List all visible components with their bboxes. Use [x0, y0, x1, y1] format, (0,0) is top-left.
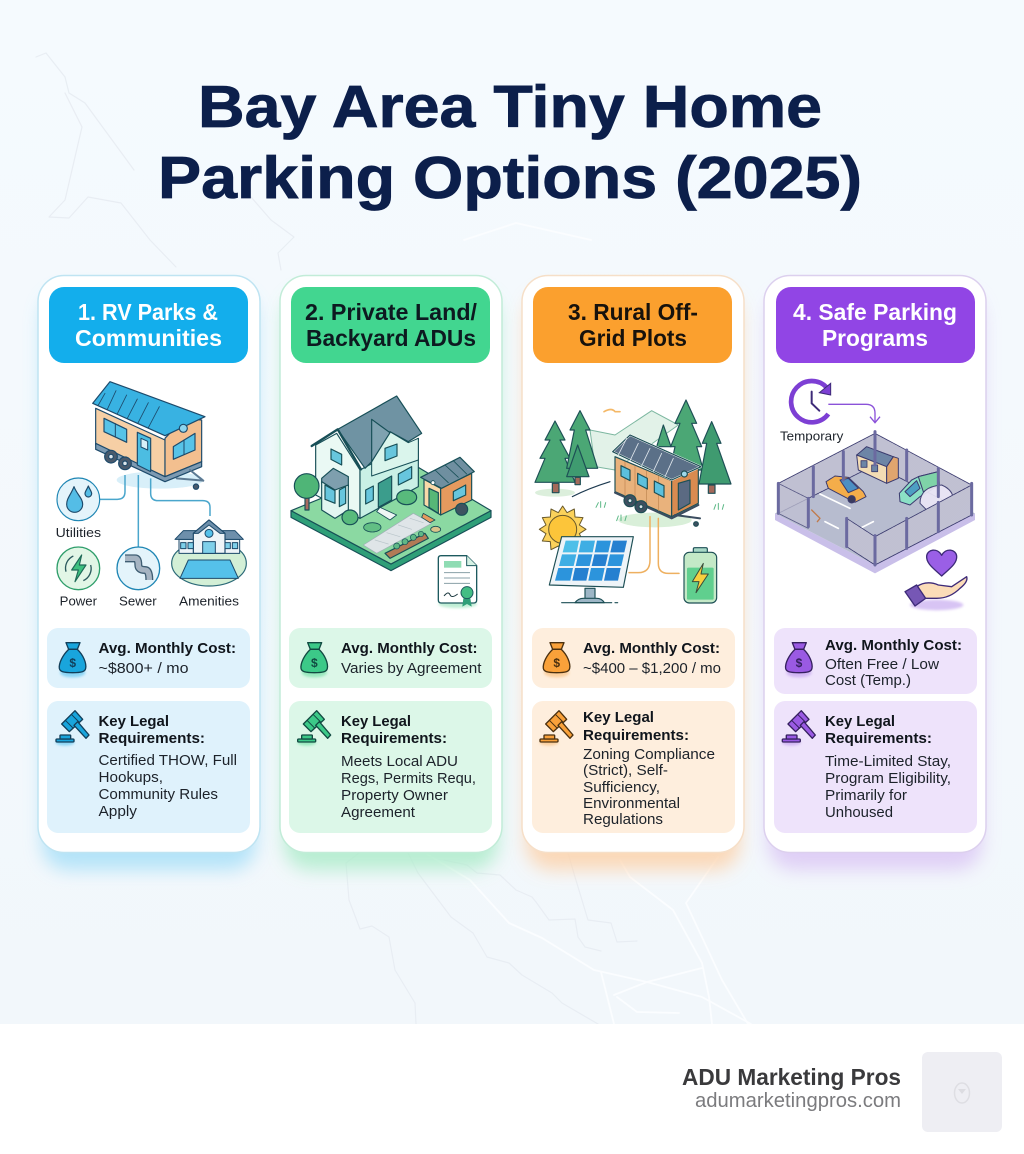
legal box: rural off-grid: [532, 701, 735, 833]
icon: money bag: $: [796, 656, 803, 670]
heading: RV parks: 1. RV Parks &: [78, 299, 218, 325]
legal box: safe parking: Unhoused: [825, 804, 893, 821]
legal box: rural off-grid: (Strict), Self-: [583, 762, 668, 779]
cost box: rural off-grid: Avg. Monthly Cost:: [583, 640, 720, 657]
labels: hookups: Sewer: [119, 593, 157, 608]
panel: private land and backyard ADUs: [280, 276, 502, 870]
legal box: RV parks: Community Rules: [98, 786, 218, 803]
illustration: fenced safe parking lot: [775, 432, 975, 573]
icon: gavel: [540, 711, 573, 746]
icon: temporary clock: [780, 381, 880, 444]
legal box: RV parks: Key Legal: [98, 713, 169, 730]
legal box: safe parking: Requirements:: [825, 730, 932, 747]
cost box: RV parks: ~$800+ / mo: [98, 660, 188, 677]
legal box: RV parks: Requirements:: [98, 730, 205, 747]
legal box: private land: [289, 701, 492, 833]
legal box: rural off-grid: Zoning Compliance: [583, 746, 715, 763]
legal box: RV parks: [47, 701, 250, 833]
heading: safe parking: 4. Safe Parking: [793, 299, 957, 325]
icon: signed agreement document: [438, 556, 477, 608]
cost box: rural off-grid: ~$400 – $1,200 / mo: [583, 660, 721, 677]
legal box: private land: Property Owner: [341, 787, 448, 804]
icon: gavel: [297, 711, 331, 746]
legal box: safe parking: [774, 701, 977, 833]
legal box: rural off-grid: Requirements:: [583, 727, 689, 744]
icon: gavel: [782, 711, 815, 746]
heading: rural off-grid: Grid Plots: [579, 325, 687, 351]
legal box: safe parking: Primarily for: [825, 787, 907, 804]
icon: money bag: $: [69, 656, 76, 670]
background: faint bay area map lines: [36, 53, 751, 1024]
heading: safe parking: [776, 287, 975, 363]
heading: RV parks: [49, 287, 248, 363]
legal box: rural off-grid: Environmental: [583, 795, 680, 812]
legal box: safe parking: Program Eligibility,: [825, 770, 951, 787]
cost box: safe parking: Often Free / Low: [825, 656, 939, 673]
labels: hookups: Power: [60, 593, 98, 608]
legal box: safe parking: Key Legal: [825, 713, 895, 730]
heading: private land: 2. Private Land/: [305, 299, 477, 325]
icon: money bag: [301, 643, 328, 677]
heading: private land: [291, 287, 490, 363]
icon: sewer: [117, 547, 160, 590]
logo placeholder: [922, 1052, 1002, 1132]
illustration: off-grid tiny house with solar and battery: [535, 400, 731, 603]
legal box: private land: Requirements:: [341, 730, 447, 747]
footer: [0, 1024, 1024, 1154]
legal box: private land: Agreement: [341, 804, 416, 821]
legal box: private land: Key Legal: [341, 713, 411, 730]
illustration: tiny house with utility hookups: [56, 382, 246, 608]
legal box: private land: Meets Local ADU: [341, 753, 458, 770]
icon: money bag: $: [311, 656, 318, 670]
icon: temporary clock: Temporary: [780, 429, 844, 444]
illustration: house with backyard ADU: [291, 396, 491, 571]
icon: money bag: $: [553, 656, 560, 670]
panel: safe parking programs: [764, 276, 986, 870]
icon: gavel: [56, 711, 89, 746]
cost box: private land: Varies by Agreement: [341, 660, 482, 677]
legal box: rural off-grid: Key Legal: [583, 709, 654, 726]
heading: rural off-grid: [533, 287, 732, 363]
brand name: ADU Marketing Pros: [682, 1064, 901, 1090]
panel: rural off-grid plots: [522, 276, 744, 870]
legal box: rural off-grid: Regulations: [583, 811, 663, 828]
cost box: RV parks: [47, 628, 250, 688]
legal box: RV parks: Hookups,: [98, 769, 163, 786]
labels: hookups: Amenities: [179, 593, 240, 608]
cost box: rural off-grid: [532, 628, 735, 688]
labels: hookups: Utilities: [56, 525, 102, 540]
labels: hookups: [56, 525, 240, 608]
icon: money bag: [543, 643, 570, 677]
cost box: private land: Avg. Monthly Cost:: [341, 640, 478, 657]
icon: power: [57, 547, 100, 590]
cost box: RV parks: Avg. Monthly Cost:: [98, 640, 236, 657]
legal box: safe parking: Time-Limited Stay,: [825, 753, 951, 770]
heading: rural off-grid: 3. Rural Off-: [568, 299, 698, 325]
cost box: safe parking: Cost (Temp.): [825, 672, 911, 689]
icon: heart in hand: [905, 550, 967, 610]
title: [158, 74, 862, 211]
icon: money bag: [786, 643, 812, 677]
legal box: RV parks: Apply: [98, 803, 138, 820]
legal box: rural off-grid: Sufficiency,: [583, 779, 660, 796]
panel: RV parks and communities: [38, 276, 260, 870]
heading: safe parking: Programs: [822, 325, 928, 351]
icon: money bag: [59, 643, 86, 677]
icon: amenities: [172, 520, 246, 586]
brand url: adumarketingpros.com: [695, 1090, 901, 1112]
cost box: safe parking: Avg. Monthly Cost:: [825, 637, 962, 654]
title: Parking Options (2025): [158, 145, 862, 211]
legal box: RV parks: Certified THOW, Full: [98, 752, 237, 769]
legal box: private land: Regs, Permits Requ,: [341, 770, 476, 787]
title: Bay Area Tiny Home: [198, 74, 822, 140]
heading: RV parks: Communities: [75, 325, 222, 351]
heading: private land: Backyard ADUs: [306, 325, 476, 351]
cost box: private land: [289, 628, 492, 688]
cost box: safe parking: [774, 628, 977, 694]
